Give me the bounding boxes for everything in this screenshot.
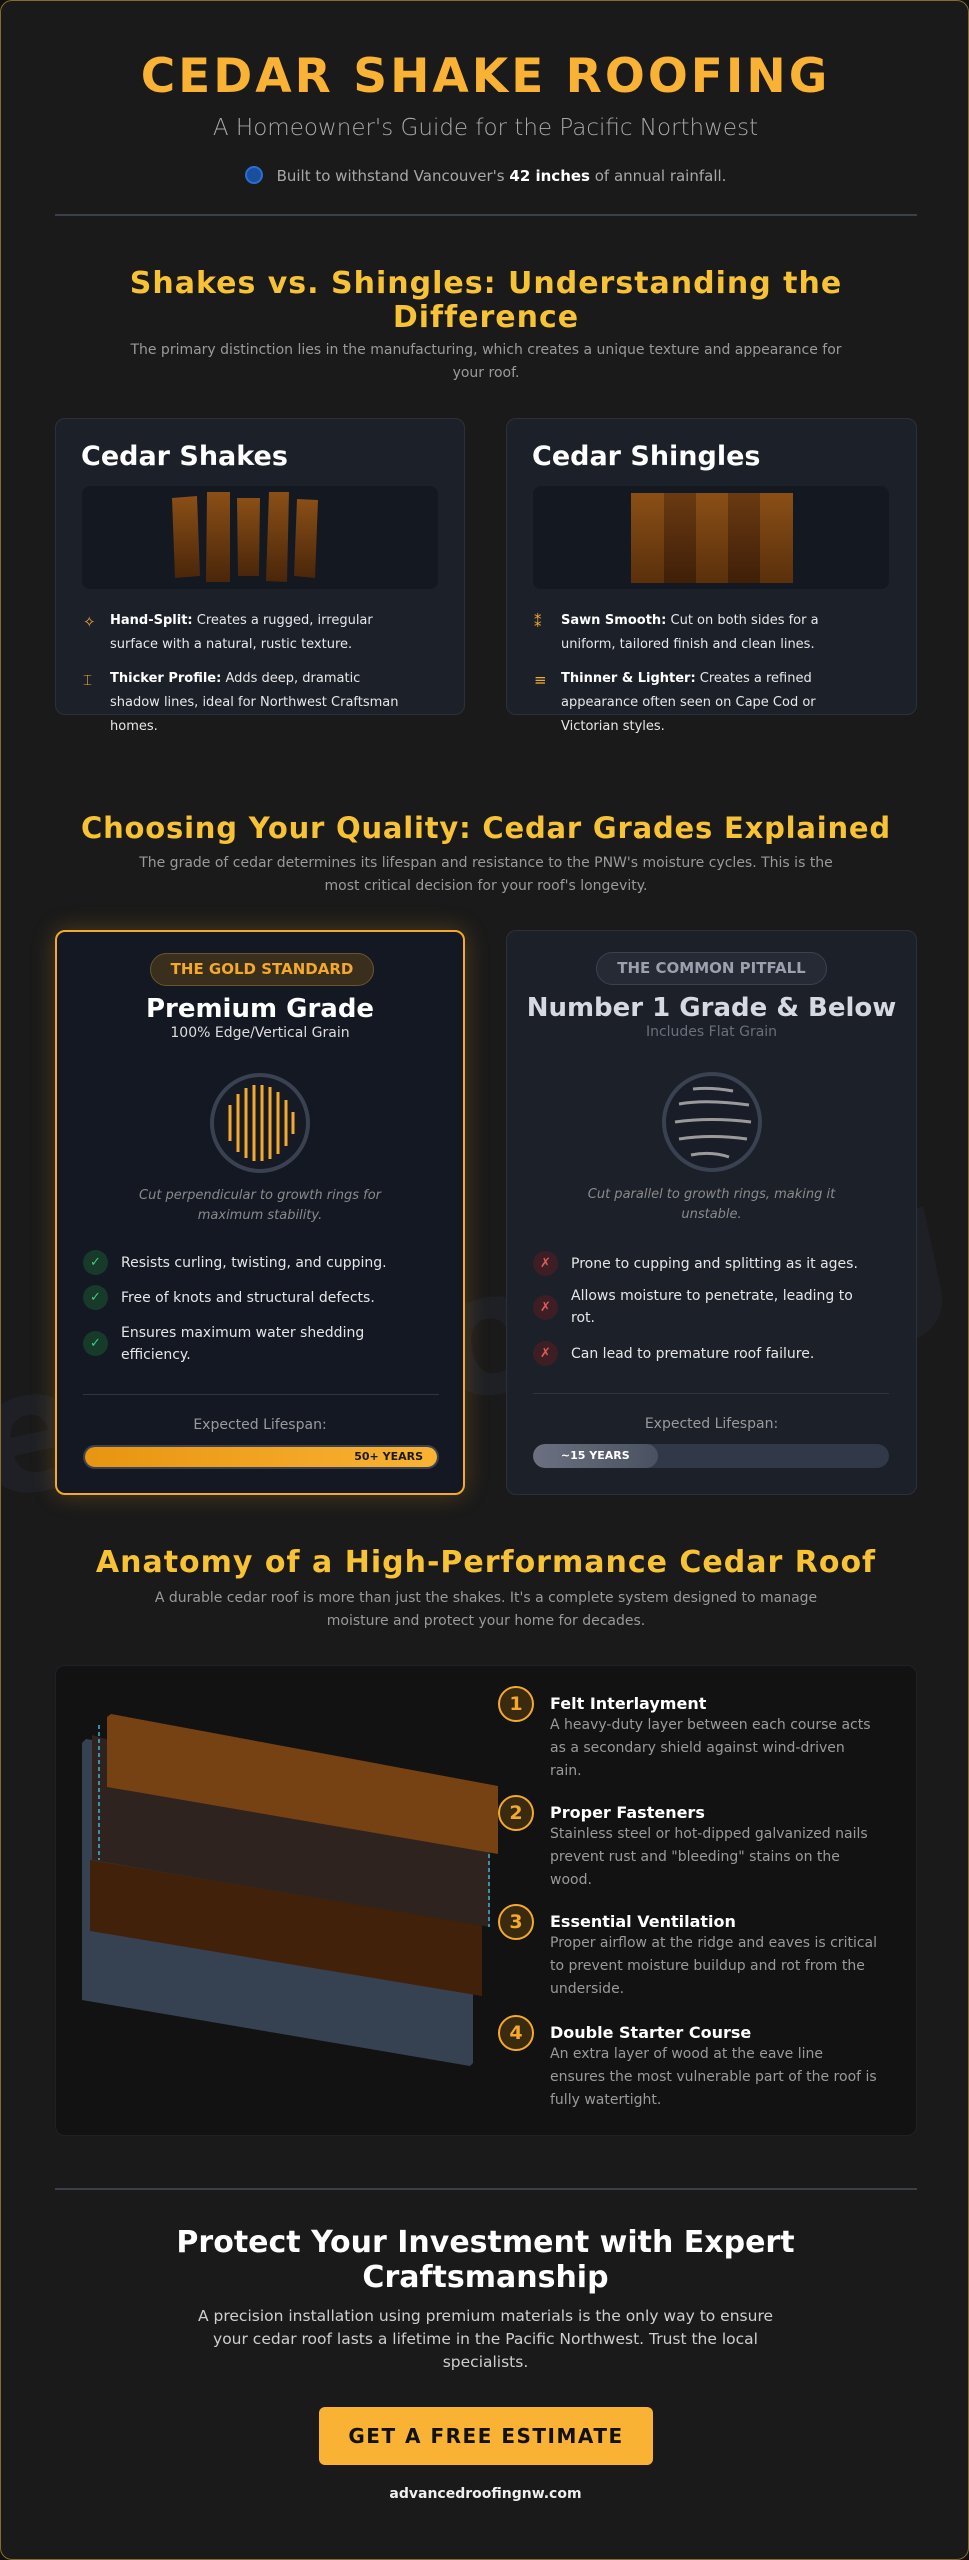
lifespan bar: Expected Lifespan: [645, 1416, 778, 1432]
benefits list: ✓ [90, 1336, 101, 1351]
title: CEDAR SHAKE ROOFING [141, 49, 830, 104]
item 3: ventilation: Proper airflow at the ridge and eaves is critical to prevent moisture buildup and rot from the underside. [550, 1935, 877, 1997]
panel: cedar shingles: ⁑ [534, 613, 542, 631]
item 3: ventilation [498, 1904, 877, 1997]
badge [150, 953, 374, 986]
icon: vertical grain [210, 1073, 310, 1173]
bullet: hand-split: Hand-Split: Creates a rugged, irregular surface with a natural, rustic texture. [110, 613, 373, 652]
panel: premium grade: 50+ YEARS [354, 1450, 423, 1463]
benefits list: Ensures maximum water shedding efficiency. [121, 1325, 364, 1363]
grade title: Premium Grade [146, 994, 374, 1024]
panel: cedar shingles: ≡ [534, 671, 547, 689]
lifespan bar: Expected Lifespan: [193, 1417, 327, 1433]
panel: anatomy [55, 1665, 917, 2136]
card title: Cedar Shingles [532, 441, 760, 472]
drawbacks list: Prone to cupping and splitting as it ages. [571, 1256, 858, 1272]
benefits list: ✓ [90, 1290, 101, 1305]
image: shakes [82, 486, 438, 589]
item 1: felt interlayment: Felt Interlayment [550, 1694, 706, 1713]
image: shingles [533, 486, 889, 589]
panel: cedar shakes: ⌶ [83, 671, 92, 689]
benefits list: Free of knots and structural defects. [121, 1290, 375, 1306]
cta heading: Protect Your Investment with Expert Craftsmanship [176, 2225, 795, 2295]
badge: THE COMMON PITFALL [617, 959, 806, 977]
text: 4 [509, 2022, 523, 2044]
grade title: Number 1 Grade & Below [527, 993, 896, 1023]
caption: Cut parallel to growth rings, making it unstable. [588, 1187, 835, 1222]
url: advancedroofingnw.com [389, 2486, 582, 2502]
heading: shakes vs shingles: Shakes vs. Shingles: Understanding the Difference [130, 266, 842, 335]
bullet: sawn smooth: Sawn Smooth: Cut on both sides for a uniform, tailored finish and clean lines. [561, 613, 819, 652]
item 4: starter course: An extra layer of wood at the eave line ensures the most vulnerable part of the roof is fully watertight. [550, 2046, 877, 2108]
heading: anatomy: Anatomy of a High-Performance Cedar Roof [96, 1545, 876, 1580]
intro text: The primary distinction lies in the manufacturing, which creates a unique texture and appearance for your roof. [130, 342, 842, 381]
panel: number 1 grade: ~15 YEARS [561, 1449, 630, 1462]
badge: THE GOLD STANDARD [171, 960, 353, 978]
drawbacks list: Can lead to premature roof failure. [571, 1346, 814, 1362]
grades intro: The grade of cedar determines its lifespan and resistance to the PNW's moisture cycles. This is the most critical decision for your roof's longevity. [139, 855, 833, 894]
drawbacks list: Allows moisture to penetrate, leading to rot. [571, 1288, 853, 1326]
item 4: starter course [498, 2015, 877, 2108]
panel: cedar shakes [55, 418, 465, 715]
item 2: fasteners: Proper Fasteners [550, 1803, 705, 1822]
item 2: fasteners [498, 1795, 868, 1888]
panel: premium grade: 100% Edge/Vertical Grain [170, 1025, 350, 1041]
panel: premium grade [55, 930, 465, 1495]
item 4: starter course: Double Starter Course [550, 2023, 751, 2042]
rainfall note: Built to withstand Vancouver's 42 inches of annual rainfall. [277, 167, 726, 185]
benefits list [83, 1250, 387, 1363]
panel: cedar shingles [506, 418, 917, 715]
icon: flat grain [662, 1072, 762, 1172]
panel: number 1 grade [506, 930, 917, 1495]
text: 1 [509, 1693, 523, 1715]
cta text: A precision installation using premium materials is the only way to ensure your cedar roof lasts a lifetime in the Pacific Northwest. Trust the local specialists. [198, 2307, 773, 2371]
heading: cedar grades: Choosing Your Quality: Cedar Grades Explained [81, 811, 891, 845]
benefits list: Resists curling, twisting, and cupping. [121, 1255, 387, 1271]
drawbacks list: ✗ [540, 1300, 551, 1315]
button: GET A FREE ESTIMATE [348, 2424, 624, 2448]
button [319, 2407, 653, 2465]
panel: number 1 grade: Includes Flat Grain [646, 1024, 777, 1040]
text: 3 [509, 1911, 523, 1933]
drawbacks list: ✗ [540, 1346, 551, 1361]
bullet: thicker profile: Thicker Profile: Adds deep, dramatic shadow lines, ideal for Northwest Craftsman homes. [110, 671, 398, 734]
subtitle: A Homeowner's Guide for the Pacific Northwest [213, 115, 758, 141]
anatomy intro: A durable cedar roof is more than just the shakes. It's a complete system designed to manage moisture and protect your home for decades. [155, 1590, 817, 1629]
item 2: fasteners: Stainless steel or hot-dipped galvanized nails prevent rust and "bleeding" stains on the wood. [550, 1826, 868, 1888]
bullet: thinner: Thinner & Lighter: Creates a refined appearance often seen on Cape Cod or Victorian styles. [561, 671, 816, 734]
item 1: felt interlayment [498, 1686, 871, 1779]
text: 2 [509, 1802, 523, 1824]
card title: Cedar Shakes [81, 441, 288, 472]
benefits list: ✓ [90, 1255, 101, 1270]
drawbacks list [533, 1251, 858, 1366]
panel: cedar shakes: ✧ [83, 613, 96, 631]
caption: Cut perpendicular to growth rings for maximum stability. [139, 1188, 381, 1223]
item 1: felt interlayment: A heavy-duty layer between each course acts as a secondary shield against wind-driven rain. [550, 1717, 871, 1779]
badge [596, 952, 827, 985]
item 3: ventilation: Essential Ventilation [550, 1912, 736, 1931]
diagram: roof layers [82, 1714, 498, 2066]
drawbacks list: ✗ [540, 1256, 551, 1271]
